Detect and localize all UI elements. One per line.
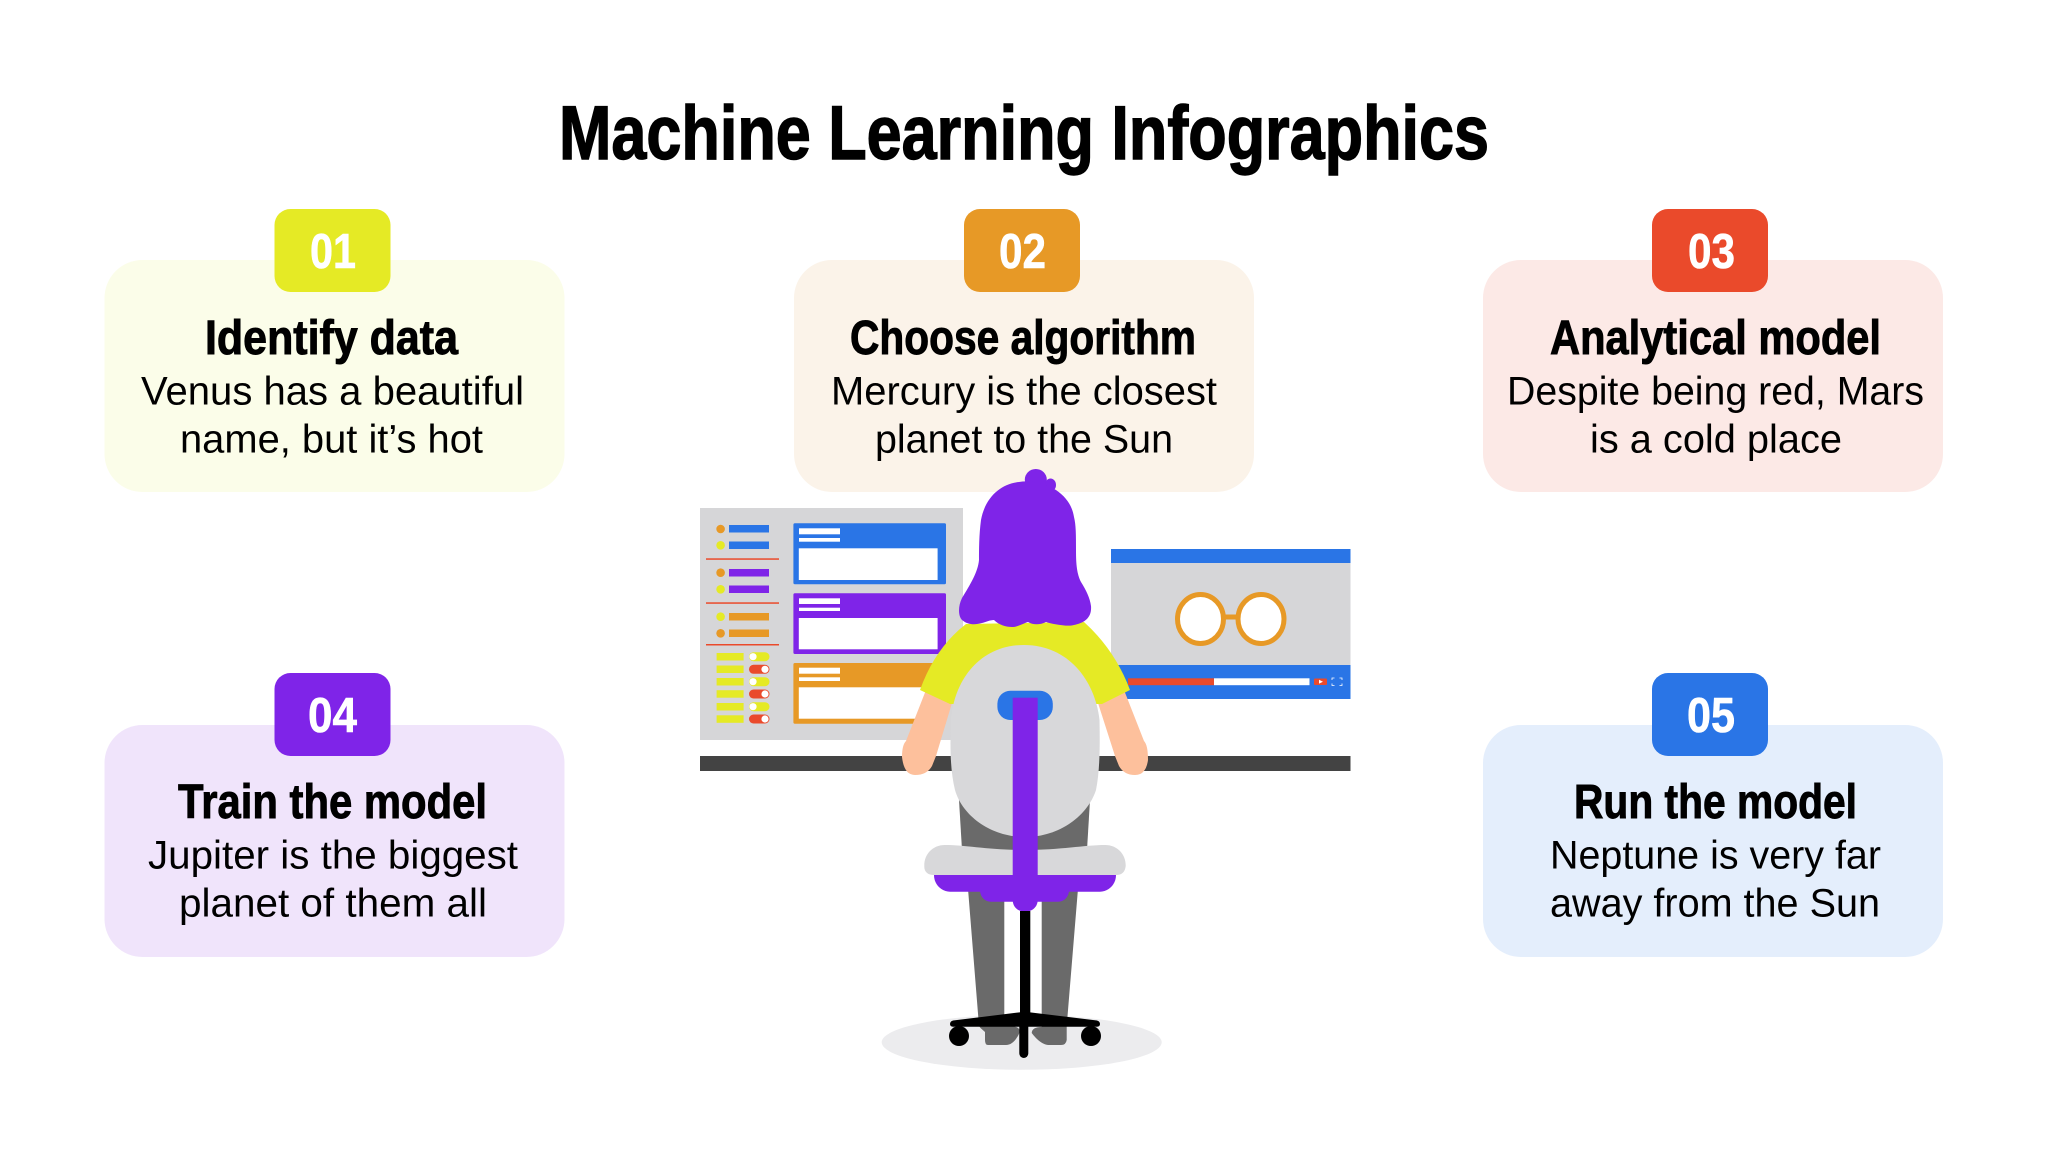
heading: choose algorithm: Choose algorithm bbox=[850, 312, 1196, 365]
badge 04 bbox=[274, 673, 390, 756]
text: analytical model description: Despite being red, Mars bbox=[1507, 370, 1924, 414]
badge 04: 04 bbox=[308, 689, 357, 743]
seat cushion bbox=[924, 845, 1126, 875]
heading: analytical model: Analytical model bbox=[1550, 312, 1881, 365]
heading: identify data: Identify data bbox=[205, 312, 458, 365]
badge 01: 01 bbox=[310, 225, 356, 279]
title: Machine Learning Infographics bbox=[559, 91, 1489, 176]
panel: 01 identify data bbox=[104, 209, 564, 492]
badge 02 bbox=[964, 209, 1080, 292]
text: run the model description bbox=[1550, 834, 1881, 926]
text: run the model description: away from the Sun bbox=[1550, 882, 1880, 926]
text: train the model description: Jupiter is the biggest bbox=[148, 834, 518, 878]
seat base and chair spine bbox=[934, 698, 1116, 912]
left monitor dashboard bbox=[700, 508, 963, 740]
desk bbox=[700, 756, 1350, 771]
illustration: person at desk bbox=[700, 469, 1350, 1070]
hair bbox=[959, 481, 1091, 627]
text: identify data description bbox=[141, 370, 524, 462]
pants upper bbox=[959, 800, 1090, 850]
text: train the model description bbox=[148, 834, 518, 926]
chair pole and star base bbox=[949, 911, 1101, 1058]
text: analytical model description: is a cold place bbox=[1590, 418, 1842, 462]
legs and shoes bbox=[968, 885, 1078, 1045]
text: analytical model description bbox=[1507, 370, 1924, 462]
arms bbox=[902, 690, 1148, 775]
headrest bbox=[997, 691, 1053, 720]
chair back bbox=[950, 645, 1100, 837]
hair tie buns bbox=[1025, 469, 1056, 492]
shirt bbox=[920, 622, 1130, 704]
text: identify data description: Venus has a beautiful bbox=[141, 370, 524, 414]
right monitor video player bbox=[1111, 549, 1350, 699]
badge 02: 02 bbox=[999, 225, 1046, 279]
panel: 04 train the model bbox=[104, 673, 564, 957]
floor shadow bbox=[882, 1015, 1162, 1070]
badge 05: 05 bbox=[1687, 689, 1735, 743]
text: identify data description: name, but it’s hot bbox=[180, 418, 483, 462]
badge 03 bbox=[1652, 209, 1768, 292]
text: train the model description: planet of them all bbox=[179, 882, 487, 926]
panel: 03 analytical model bbox=[1483, 209, 1943, 492]
text: run the model description: Neptune is very far bbox=[1550, 834, 1881, 878]
text: choose algorithm description: Mercury is the closest bbox=[831, 370, 1217, 414]
text: choose algorithm description bbox=[831, 370, 1217, 462]
panel: 05 run the model bbox=[1483, 673, 1943, 957]
text: choose algorithm description: planet to the Sun bbox=[875, 418, 1173, 462]
badge 05 bbox=[1652, 673, 1768, 756]
badge 03: 03 bbox=[1688, 225, 1735, 279]
badge 01 bbox=[274, 209, 390, 292]
heading: train the model: Train the model bbox=[178, 776, 487, 829]
panel: 02 choose algorithm bbox=[794, 209, 1254, 492]
heading: run the model: Run the model bbox=[1574, 776, 1857, 829]
icon: glasses bbox=[1178, 594, 1284, 644]
